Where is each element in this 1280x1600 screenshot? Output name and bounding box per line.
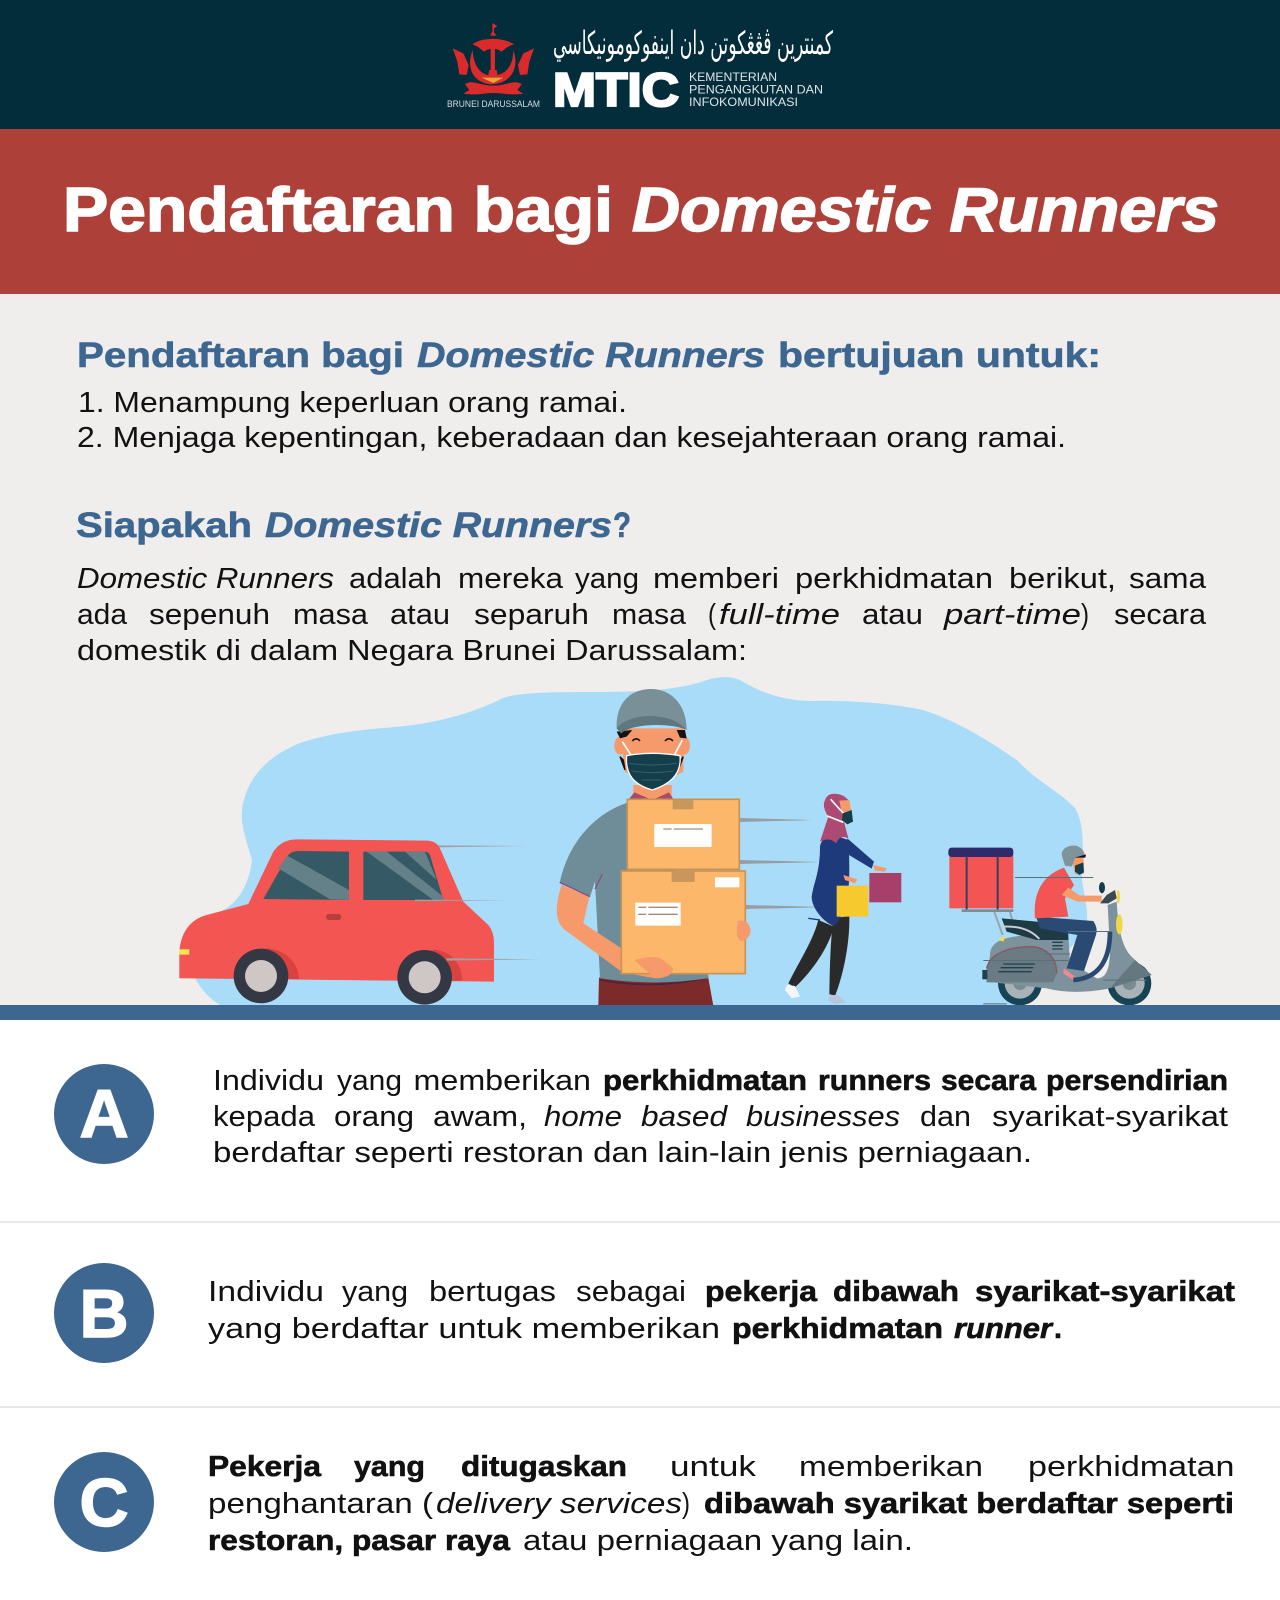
item C: delivery employees <box>54 1451 1234 1557</box>
item A: private runners: secara <box>941 1065 1037 1097</box>
item C: delivery employees: C <box>79 1465 129 1541</box>
item A: private runners: memberikan <box>414 1065 591 1097</box>
illustration: delivery runners scene <box>0 677 1280 1020</box>
item B: company employed runners: B <box>79 1276 129 1352</box>
item A: private runners: syarikat-syarikat <box>992 1101 1228 1133</box>
item A: private runners: home <box>544 1101 622 1133</box>
panel: title banner: Domestic Runners <box>632 176 1219 245</box>
item A: private runners: persendirian <box>1046 1065 1228 1097</box>
icon: masked man carrying boxes <box>557 689 751 1006</box>
panel: intro background <box>0 294 1280 1005</box>
text block: definition paragraph: ) <box>1081 599 1089 631</box>
text block: definition paragraph: ( <box>708 599 716 631</box>
item C: delivery employees: Pekerja <box>208 1451 322 1483</box>
item A: private runners: Individu <box>213 1065 324 1097</box>
item B: company employed runners: Individu <box>208 1276 324 1308</box>
text block: purpose list: 2. Menjaga kepentingan, keberadaan dan kesejahteraan orang ramai. <box>77 422 1066 454</box>
brunei darussalam label: BRUNEI DARUSSALAM <box>447 99 540 110</box>
item C: delivery employees: delivery services <box>436 1488 682 1520</box>
text block: definition paragraph: atau <box>862 599 923 631</box>
item A: private runners: dan <box>920 1101 971 1133</box>
heading: who are domestic runners <box>76 506 631 545</box>
text block: purpose list <box>77 387 1066 454</box>
text block: definition paragraph: atau <box>390 599 450 631</box>
road bar <box>0 1005 1280 1020</box>
icon: woman with shopping bags <box>770 794 901 1004</box>
item A: private runners: businesses <box>746 1101 900 1133</box>
heading: purpose: bertujuan untuk: <box>778 336 1101 375</box>
MTIC wordmark: MTIC <box>553 63 679 116</box>
item A: private runners: orang <box>334 1101 414 1133</box>
item B: company employed runners: perkhidmatan <box>732 1313 943 1345</box>
text block: definition paragraph: secara <box>1114 599 1207 631</box>
item A: private runners: A <box>79 1076 129 1152</box>
item A: private runners: yang <box>337 1065 402 1097</box>
text block: definition paragraph: berikut, <box>1009 563 1116 595</box>
item B: company employed runners: pekerja <box>705 1276 818 1308</box>
item B: company employed runners: bertugas <box>429 1276 556 1308</box>
item C: delivery employees: perkhidmatan <box>1028 1451 1234 1483</box>
text block: definition paragraph: sama <box>1129 563 1207 595</box>
item A: private runners <box>54 1064 1228 1169</box>
text block: definition paragraph: ada <box>77 599 128 631</box>
item C: delivery employees: untuk <box>670 1451 757 1483</box>
item B: company employed runners: dibawah <box>833 1276 959 1308</box>
text block: definition paragraph: part-time <box>943 599 1081 631</box>
item A: private runners: awam, <box>433 1101 527 1133</box>
item B: company employed runners: syarikat-syarikat <box>975 1276 1235 1308</box>
panel: title banner: Pendaftaran bagi <box>63 176 613 245</box>
item B: company employed runners: yang berdaftar untuk memberikan <box>208 1313 720 1345</box>
ministry name in malay: KEMENTERIAN <box>689 70 777 84</box>
item C: delivery employees: ) <box>682 1488 690 1520</box>
text block: purpose list: 1. Menampung keperluan orang ramai. <box>78 387 627 419</box>
item B: company employed runners: sebagai <box>576 1276 686 1308</box>
ministry name in malay <box>689 70 823 109</box>
ministry name in malay: INFOKOMUNIKASI <box>689 95 798 109</box>
item C: delivery employees: memberikan <box>799 1451 983 1483</box>
text block: definition paragraph: masa <box>293 599 369 631</box>
panel: title banner <box>0 129 1280 294</box>
item A: private runners: runners <box>818 1065 931 1097</box>
text block: definition paragraph: domestik di dalam Negara Brunei Darussalam: <box>77 635 747 667</box>
text block: definition paragraph <box>77 563 1207 667</box>
text block: definition paragraph: full-time <box>719 599 840 631</box>
item C: delivery employees: dibawah syarikat berdaftar seperti <box>704 1488 1234 1520</box>
item B: company employed runners: runner <box>954 1313 1054 1345</box>
heading: purpose <box>77 336 1101 375</box>
text block: definition paragraph: adalah <box>349 563 442 595</box>
text block: definition paragraph: memberi <box>653 563 779 595</box>
item B: company employed runners <box>54 1263 1235 1363</box>
item A: private runners: perkhidmatan <box>603 1065 807 1097</box>
icon: Brunei crest <box>453 23 534 94</box>
item C: delivery employees: ditugaskan <box>461 1451 627 1483</box>
item C: delivery employees: atau perniagaan yang lain. <box>523 1525 913 1557</box>
item C: delivery employees: yang <box>354 1451 425 1483</box>
text block: definition paragraph: separuh <box>474 599 589 631</box>
icon: red car <box>179 839 542 1005</box>
text block: definition paragraph: Domestic Runners <box>77 563 334 595</box>
item B: company employed runners: . <box>1054 1313 1062 1345</box>
heading: who are domestic runners: Siapakah <box>76 506 252 545</box>
text block: definition paragraph: sepenuh <box>149 599 270 631</box>
item B: company employed runners: yang <box>342 1276 408 1308</box>
item A: private runners: kepada <box>213 1101 316 1133</box>
text block: definition paragraph: perkhidmatan <box>795 563 993 595</box>
background blob <box>192 677 1087 1005</box>
jawi ministry name: كمنترين ڤڠڠكوتن دان اينفوكومونيكاسي <box>553 24 833 62</box>
icon: rider on scooter with delivery box <box>948 846 1152 1005</box>
text block: definition paragraph: mereka <box>458 563 564 595</box>
text block: definition paragraph: masa <box>612 599 687 631</box>
heading: who are domestic runners: Domestic Runners <box>265 506 612 545</box>
heading: purpose: Pendaftaran bagi <box>77 336 404 375</box>
item A: private runners: berdaftar seperti restoran dan lain-lain jenis perniagaan. <box>213 1137 1032 1169</box>
ministry name in malay: PENGANGKUTAN DAN <box>689 82 823 96</box>
text block: definition paragraph: yang <box>575 563 639 595</box>
item C: delivery employees: restoran, pasar raya <box>208 1525 511 1557</box>
item C: delivery employees: penghantaran ( <box>208 1488 433 1520</box>
panel: header with ministry logo <box>0 0 1280 129</box>
heading: who are domestic runners: ? <box>613 506 631 545</box>
speed lines behind man <box>740 818 822 909</box>
item A: private runners: based <box>641 1101 728 1133</box>
heading: purpose: Domestic Runners <box>417 336 765 375</box>
